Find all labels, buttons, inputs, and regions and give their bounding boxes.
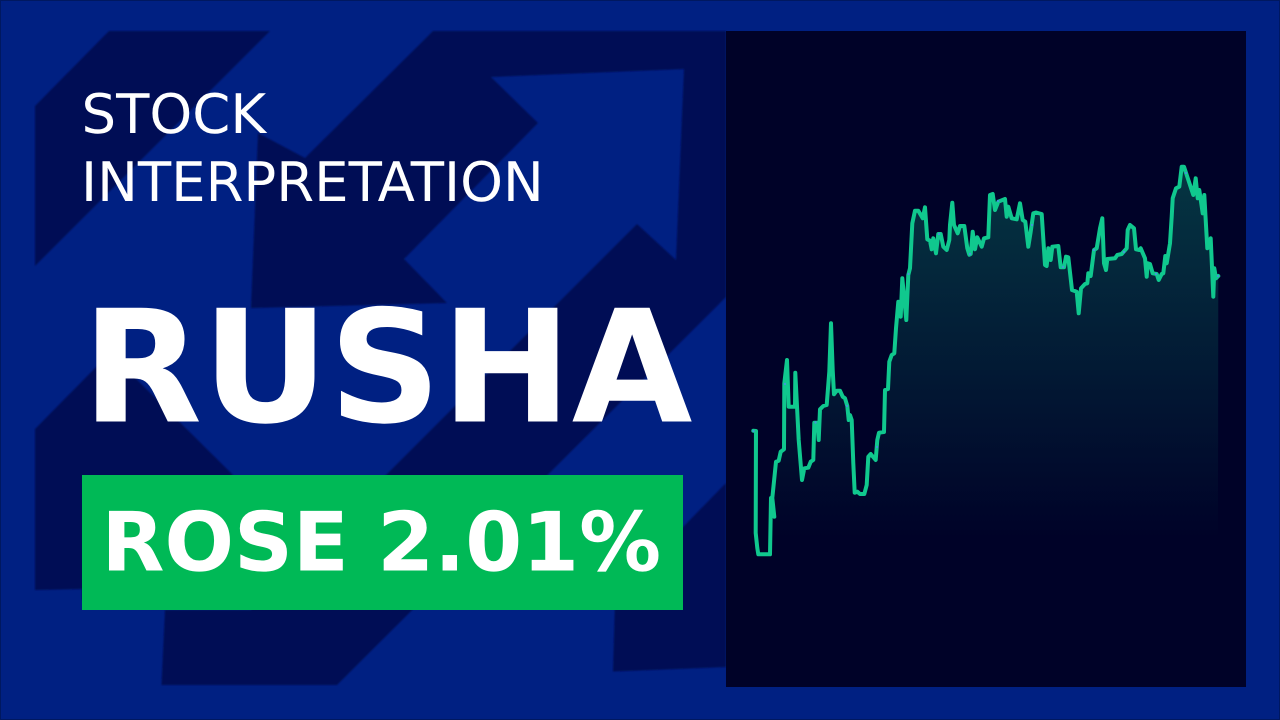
area line chart [752, 167, 1219, 554]
price line [753, 167, 1218, 554]
heading: stock interpretation: STOCK [82, 82, 267, 146]
panel: chart background [726, 31, 1246, 687]
heading: stock interpretation [81, 82, 544, 214]
data point markers [752, 172, 1219, 448]
background arrow pattern [35, 31, 726, 685]
ticker symbol: RUSHA [82, 276, 692, 458]
badge: price change: ROSE 2.01% [102, 496, 661, 590]
heading: stock interpretation: INTERPRETATION [81, 150, 544, 214]
area fill under price line [753, 167, 1218, 554]
badge: price change [82, 475, 683, 610]
